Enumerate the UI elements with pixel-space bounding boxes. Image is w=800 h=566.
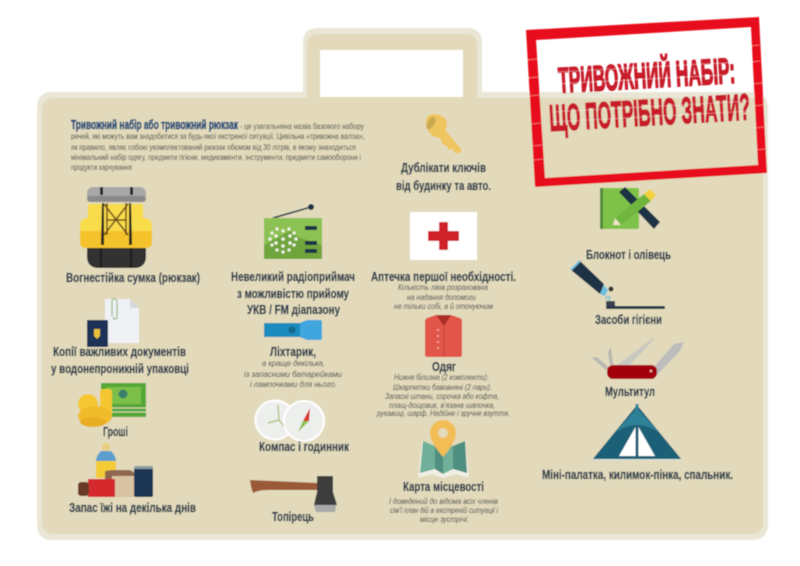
label: backpack: Вогнестійка сумка (рюкзак): [66, 271, 200, 285]
label: flashlight: Ліхтарик,: [270, 345, 316, 359]
label: notebook: Блокнот і олівець: [586, 248, 671, 262]
label: flashlight: із запасними батарейками: [244, 370, 343, 379]
label: clothes: Шкарпетки бавовняні (2 пари).: [393, 383, 492, 392]
label: flashlight: і лампочками для нього.: [250, 380, 337, 389]
label: first aid: [371, 270, 516, 311]
label: multitool: Мультитул: [605, 385, 655, 399]
stamp: [526, 17, 767, 187]
label: compass and clock: Компас і годинник: [259, 440, 350, 454]
label: hygiene: Засоби гігієни: [595, 313, 662, 327]
icon: hatchet: [250, 476, 337, 512]
label: first aid: Аптечка першої необхідності.: [371, 270, 516, 284]
label: clothes: [376, 360, 510, 418]
label: flashlight: а краще декілька,: [262, 359, 325, 368]
label: map: Карта місцевості: [403, 480, 484, 494]
icon: map with pin: [418, 420, 469, 478]
intro text block: як правило, являє собою укомплектований рюкзак обємом від 30 літрів, в якому знаходиться: [71, 142, 356, 152]
icon: key: [424, 114, 462, 153]
label: clothes: плащ-дощовик, в'язана шапочка,: [389, 401, 495, 410]
intro text block: Тривожний набір або тривожний рюкзак: [71, 117, 238, 132]
label: map: І доведений до відома всіх членів: [389, 497, 498, 506]
label: first aid: Кількість ліків розрахована: [398, 283, 488, 292]
icon: clock and compass: [256, 400, 324, 441]
label: money: Гроші: [103, 425, 128, 439]
label: radio: [231, 270, 355, 317]
label: keys: від будинку та авто.: [396, 179, 491, 193]
icon: documents and passport: [87, 298, 139, 347]
icon: shirt: [425, 315, 462, 357]
label: clothes: рукавиці, шарф. Надійне і зручне взуття.: [376, 409, 510, 418]
label: map: сім'ї план дій в екстреній ситуації і: [390, 506, 498, 515]
label: clothes: Нижня білизна (2 комплекти).: [394, 373, 489, 382]
label: tent: Міні-палатка, килимок-пінка, спальник.: [542, 468, 733, 482]
label: radio: Невеликий радіоприймач: [231, 270, 355, 284]
label: radio: з можливістю прийому: [237, 287, 349, 301]
label: radio: УКВ / FM діапазону: [247, 303, 340, 317]
label: keys: Дублікати ключів: [401, 161, 486, 175]
intro text block: - це узагальнена назва базового набору: [240, 121, 365, 131]
label: clothes: Одяг: [432, 360, 456, 374]
label: documents: Копії важливих документів: [53, 345, 186, 359]
label: food supply: Запас їжі на декілька днів: [69, 501, 196, 515]
icon: flashlight: [264, 320, 322, 340]
icon: money: [78, 383, 146, 427]
icon: notebook and pencil: [600, 187, 660, 229]
label: documents: у водонепроникній упаковці: [51, 362, 189, 376]
stamp wear stripes: [527, 45, 765, 160]
label: map: [389, 480, 498, 524]
label: keys: [396, 161, 491, 193]
icon: radio: [264, 204, 322, 259]
intro text block: мінімальний набір одягу, предмети гігієни, медикаменти, інструменти, предмети самооборони і: [71, 152, 361, 162]
icon: tent: [592, 404, 682, 460]
label: first aid: не тільки собі, а й оточуючим: [394, 302, 493, 311]
stamp frame: [526, 17, 767, 187]
icon: backpack: [80, 187, 152, 268]
intro text block: речей, які можуть вам знадобитися за будь-якої екстреної ситуації. Цивільна «тривожна валіза»,: [71, 131, 365, 141]
label: documents: [51, 345, 189, 376]
label: map: місце зустрічі.: [420, 515, 469, 524]
icon: first aid cross: [410, 212, 477, 260]
label: flashlight: [244, 345, 343, 389]
icon: food supply: [78, 443, 153, 497]
icon: toothpaste and toothbrush: [571, 261, 665, 309]
label: clothes: Запасні штани, сорочка або кофта,: [385, 392, 499, 401]
intro text block: продукти харчування: [71, 162, 132, 172]
icon: multitool: [592, 338, 684, 379]
intro text block: [71, 117, 365, 172]
label: hatchet: Топірець: [272, 510, 314, 524]
label: first aid: на надання допомоги: [407, 293, 476, 302]
